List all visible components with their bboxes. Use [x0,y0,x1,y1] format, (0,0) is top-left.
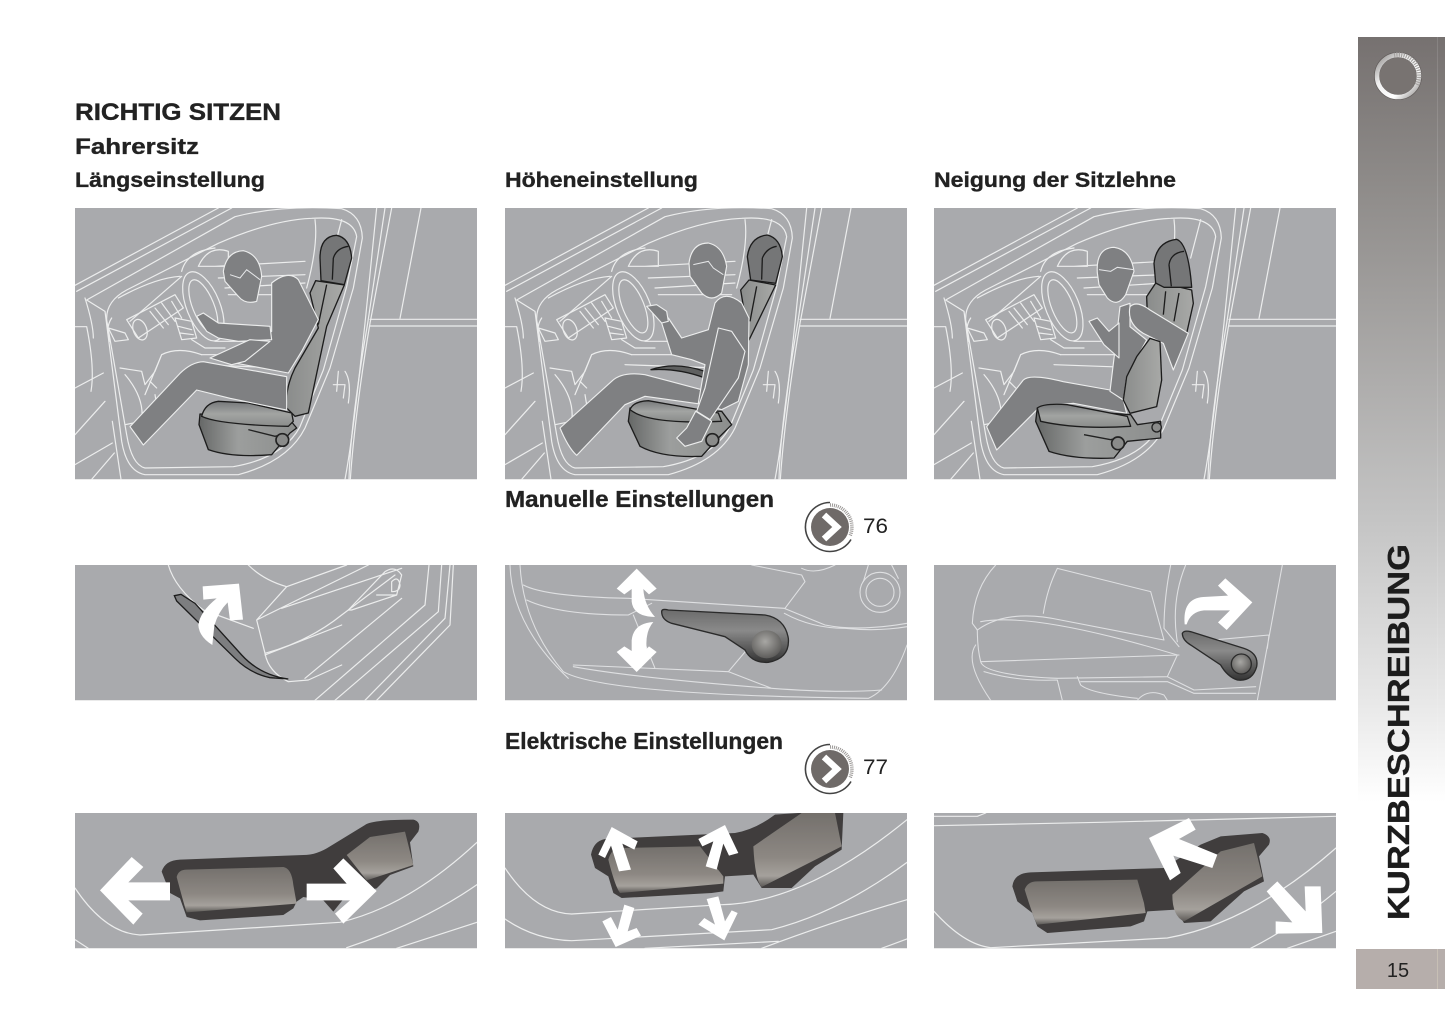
icon: chapter ring [1374,52,1422,100]
icon: see page 76 chevron [805,502,852,551]
panel: driver reaching behind, backrest tilt [934,208,1336,479]
arrow: curved up-right [198,584,243,645]
panel: driver reaching forward, longitudinal adjustment [75,208,477,479]
panel: electric fore-aft switch [75,813,477,948]
page reference 77: 77 [863,756,888,779]
page number box [1356,949,1445,989]
driver figure upright, hand on lever [560,243,749,455]
column heading: Neigung der Sitzlehne: Neigung der Sitzlehne [934,169,1176,192]
panel: driver reaching to lever, height adjustment [505,208,907,479]
lower seat back [1123,338,1162,413]
panel: manual backrest lever [934,565,1336,700]
panel: electric backrest switch [934,813,1336,948]
panel: manual height lever [505,565,907,700]
heading: Manuelle Einstellungen: Manuelle Einstellungen [505,486,774,512]
arrow: down right [698,896,738,940]
arrow: up and down curved [617,569,657,672]
arrow: up left [1149,818,1217,880]
seat back and headrest [1147,239,1193,333]
seat back and headrest [286,235,352,416]
seat cushion and base [199,401,297,456]
arrow: curved right [1184,578,1252,630]
arrow: left [100,857,170,925]
column heading: Höheneinstellung: Höheneinstellung [505,169,698,192]
arrow: down right [1267,881,1322,934]
heading: Fahrersitz: Fahrersitz [75,134,199,159]
switch [591,813,843,898]
arrow: up right [698,825,738,870]
switch [162,820,419,920]
panel: manual fore-aft bar [75,565,477,700]
arrow: right [307,858,377,924]
icon: see page 77 chevron [805,744,852,793]
title: RICHTIG SITZEN: RICHTIG SITZEN [75,99,281,126]
sidebar: chapter gradient tab [1358,37,1445,920]
switch [1012,833,1270,933]
driver figure leaning forward [130,251,318,445]
heading: Elektrische Einstellungen: Elektrische Einstellungen [505,728,783,754]
page reference 76: 76 [863,515,888,538]
seat cushion and base [1036,404,1161,458]
driver figure twisting to reach behind [987,247,1188,450]
lever [1182,631,1257,680]
page number box: 15 [1387,960,1409,982]
seat cushion and base [628,366,732,457]
arrow: up left [598,827,638,871]
chapter title rotated: KURZBESCHREIBUNG [1382,544,1416,920]
panel: electric height switch [505,813,907,948]
seat back and headrest [741,235,782,340]
arrow: down left [602,905,641,947]
column heading: Längseinstellung: Längseinstellung [75,169,265,192]
